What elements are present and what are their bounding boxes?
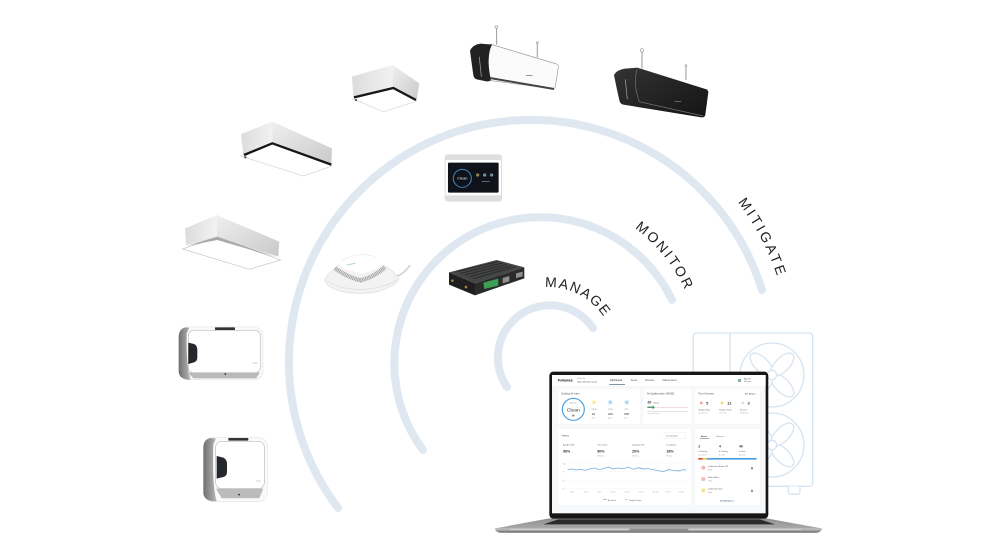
card: areas list: 4 bbox=[719, 445, 721, 449]
dashboard header: Fellowes bbox=[558, 379, 573, 383]
card: building air index: 800 bbox=[624, 412, 630, 416]
icon: recessed ceiling purifier, long bbox=[241, 122, 332, 176]
card: history chart: 50 bbox=[563, 480, 565, 482]
card: areas list: ● Clean bbox=[739, 451, 745, 453]
card: history chart: Nov 12 bbox=[611, 492, 616, 494]
dashboard header bbox=[552, 375, 766, 386]
laptop with dashboard bbox=[495, 372, 822, 533]
card: building air index: µg/m³ bbox=[608, 416, 612, 419]
icon: edge gateway controller bbox=[449, 260, 524, 295]
card: air quality index: Air Quality Index in MOSE bbox=[647, 393, 674, 396]
card: building air index: ppm bbox=[624, 417, 628, 419]
card: history chart: 20% bbox=[632, 449, 640, 453]
laptop base bbox=[495, 518, 822, 533]
card: fleet overview: 12 bbox=[727, 401, 731, 405]
card: history chart: 182 hours bbox=[632, 454, 639, 457]
card: areas list: See All Areas > bbox=[720, 499, 735, 502]
card: fleet overview: Fleet Overview bbox=[698, 393, 714, 396]
card: history chart: 88 hours bbox=[666, 454, 672, 457]
card: history chart: History bbox=[562, 434, 570, 437]
card: fleet overview: 5 bbox=[706, 401, 708, 405]
card: areas list: Conference Room 123 bbox=[708, 465, 729, 468]
card: building air index: 18 bbox=[592, 412, 595, 416]
card: history chart: Air Index bbox=[608, 499, 616, 502]
card: areas list: ● Cleaning bbox=[698, 451, 707, 453]
arc: mitigate ring bbox=[289, 120, 762, 508]
icon: hanging purifier, white bbox=[470, 26, 558, 89]
card: air quality index bbox=[643, 389, 692, 424]
label: manage: MANAGE bbox=[546, 277, 611, 316]
card: areas list: A bbox=[751, 489, 754, 493]
dashboard background bbox=[552, 375, 766, 513]
card: building air index bbox=[558, 389, 640, 424]
card: history chart: 80% bbox=[597, 449, 605, 453]
card: history chart: Nov 8 bbox=[597, 492, 602, 494]
card: areas list: No action bbox=[739, 453, 745, 456]
icon: touch display tablet: Clean bbox=[457, 176, 468, 181]
card: building air index: 200 bbox=[608, 412, 613, 416]
card: history chart: Nov 16 bbox=[625, 492, 630, 494]
card: fleet overview: For 24 hours bbox=[740, 412, 749, 415]
card: building air index: CO2 bbox=[624, 409, 628, 411]
card: history chart: Last 30 Days bbox=[666, 434, 678, 437]
card: areas list bbox=[695, 429, 760, 505]
card: areas list: Areas bbox=[701, 435, 708, 438]
card: building air index: Building Air Index bbox=[562, 392, 580, 395]
card: history chart: Nov 27 bbox=[666, 492, 671, 494]
dashboard header: Stan E bbox=[744, 377, 751, 380]
card: fleet overview: 3 bbox=[748, 401, 750, 405]
card: areas list: Devices bbox=[716, 436, 724, 438]
arc: manage ring bbox=[498, 305, 593, 387]
card: areas list: Bend bbox=[708, 492, 712, 494]
icon: recessed ceiling purifier, square bbox=[352, 65, 419, 112]
icon: recessed ceiling purifier, large plain bbox=[183, 215, 281, 269]
card: history chart: 25 bbox=[563, 489, 565, 491]
card: areas list: 2 bbox=[698, 445, 700, 449]
card: fleet overview: Replace Now bbox=[698, 409, 711, 411]
laptop screen bezel bbox=[549, 372, 768, 519]
icon: wall purifier, wide bbox=[179, 327, 263, 380]
icon: air quality sensor bbox=[325, 255, 410, 293]
dashboard header: Maintenance bbox=[663, 379, 677, 382]
card: history chart: Occupancy bbox=[666, 444, 676, 446]
card: fleet overview: 15% - 20% bbox=[719, 413, 727, 415]
label: mitigate: MITIGATE bbox=[738, 197, 786, 276]
card: air quality index: 20 bbox=[647, 401, 651, 405]
card: building air index: Air Index bbox=[570, 402, 577, 405]
card: history chart bbox=[558, 429, 691, 505]
label: monitor: MONITOR bbox=[636, 221, 692, 289]
dashboard header: Select Site bbox=[577, 377, 585, 380]
card: areas list: Conference Unit bbox=[708, 487, 723, 490]
card: areas list: Sales Office bbox=[708, 477, 720, 479]
card: history chart: Cleaning Time bbox=[632, 444, 646, 446]
card: history chart: Nov 1 bbox=[570, 492, 574, 494]
dashboard header: Nova Manufacturing bbox=[577, 380, 597, 383]
arc: monitor ring bbox=[394, 217, 672, 450]
card: history chart: 100 bbox=[563, 463, 566, 465]
dashboard header: Devices bbox=[645, 379, 655, 382]
card: history chart: Nov 20 bbox=[639, 492, 644, 494]
card: history chart: Nov 30 bbox=[679, 492, 684, 494]
card: history chart: 182 hours bbox=[597, 454, 604, 457]
card: building air index: Clean bbox=[567, 407, 580, 413]
card: fleet overview: Less than 1% bbox=[698, 412, 708, 415]
card: fleet overview: See Detail > bbox=[745, 393, 757, 396]
card: areas list: 80 - 100 bbox=[719, 454, 725, 456]
card: fleet overview: Replace Soon bbox=[719, 409, 732, 411]
card: history chart: 96% bbox=[563, 449, 571, 453]
dashboard header: Areas bbox=[631, 379, 638, 382]
card: history chart: 75 bbox=[563, 472, 565, 474]
icon: hanging purifier, black bbox=[614, 49, 708, 117]
icon: wall purifier, compact bbox=[203, 438, 267, 502]
card: history chart: Time Clean bbox=[597, 444, 607, 446]
card: history chart: Nov 24 bbox=[653, 492, 658, 494]
icon: outdoor air-handling unit outline bbox=[693, 333, 813, 494]
card: history chart: Avg Air Index bbox=[563, 443, 575, 446]
card: history chart: Avg Air Index bbox=[630, 499, 641, 502]
card: areas list: ● Cleaning bbox=[719, 451, 728, 453]
dashboard header: Dashboard bbox=[610, 379, 623, 382]
card: areas list: 40 bbox=[739, 445, 743, 449]
card: building air index: 96 bbox=[572, 415, 575, 417]
card: areas list: Bend bbox=[708, 470, 712, 472]
dashboard header: Manager bbox=[744, 381, 752, 383]
card: areas list: A bbox=[751, 466, 754, 470]
card: areas list: Clean bbox=[708, 481, 712, 483]
card: air quality index: Good bbox=[653, 402, 659, 404]
card: fleet overview bbox=[695, 389, 760, 424]
icon: touch display tablet bbox=[445, 154, 502, 202]
card: building air index: PM 2.5 bbox=[592, 409, 597, 411]
card: history chart: 18% bbox=[666, 449, 674, 453]
card: building air index: TVOC bbox=[608, 409, 614, 411]
card: areas list: Less than 75 bbox=[698, 453, 707, 456]
card: building air index: µg/m³ bbox=[592, 416, 596, 419]
card: fleet overview: Inactive bbox=[740, 408, 748, 411]
card: history chart: Nov 4 bbox=[584, 492, 588, 494]
